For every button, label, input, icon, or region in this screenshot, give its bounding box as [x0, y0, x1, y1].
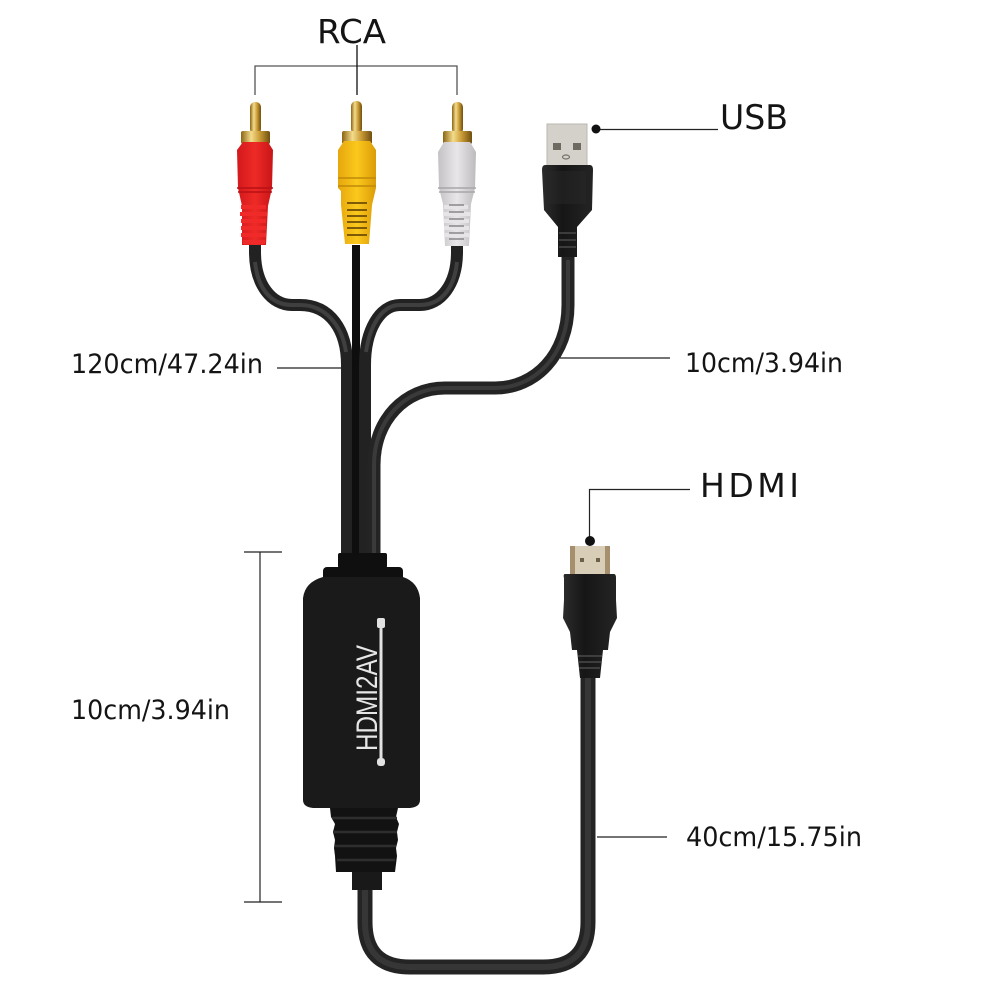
HDMI pointer	[585, 490, 690, 546]
HDMI plug	[563, 546, 617, 678]
dimension: HDMI cable: 40cm/15.75in	[686, 822, 862, 853]
converter box	[303, 553, 420, 890]
USB plug	[542, 124, 593, 257]
box shoulder	[323, 567, 403, 581]
dimension: converter box: 10cm/3.94in	[71, 695, 230, 726]
USB pointer	[592, 124, 718, 134]
dimension: USB cable: 10cm/3.94in	[685, 348, 843, 379]
RCA plug: red	[237, 102, 273, 245]
RCA plug: white	[438, 102, 476, 246]
dimension: converter box	[71, 552, 282, 902]
box strain relief	[330, 808, 399, 890]
RCA bracket	[255, 45, 457, 95]
cable: red RCA	[255, 245, 347, 555]
cable: white RCA	[365, 245, 457, 555]
box neck	[338, 553, 387, 568]
box label: HDMI2AV	[351, 645, 384, 751]
RCA plug: yellow	[338, 101, 376, 244]
box body	[303, 577, 420, 808]
label: RCA: RCA	[317, 12, 386, 51]
box label rule	[377, 618, 385, 766]
label: HDMI: HDMI	[700, 466, 799, 505]
cables	[255, 245, 588, 967]
label: USB: USB	[720, 98, 788, 138]
cable: HDMI	[365, 670, 588, 967]
dimension: 120cm cable: 120cm/47.24in	[71, 349, 263, 380]
cable: USB	[374, 250, 568, 555]
cable: yellow RCA	[352, 245, 360, 555]
